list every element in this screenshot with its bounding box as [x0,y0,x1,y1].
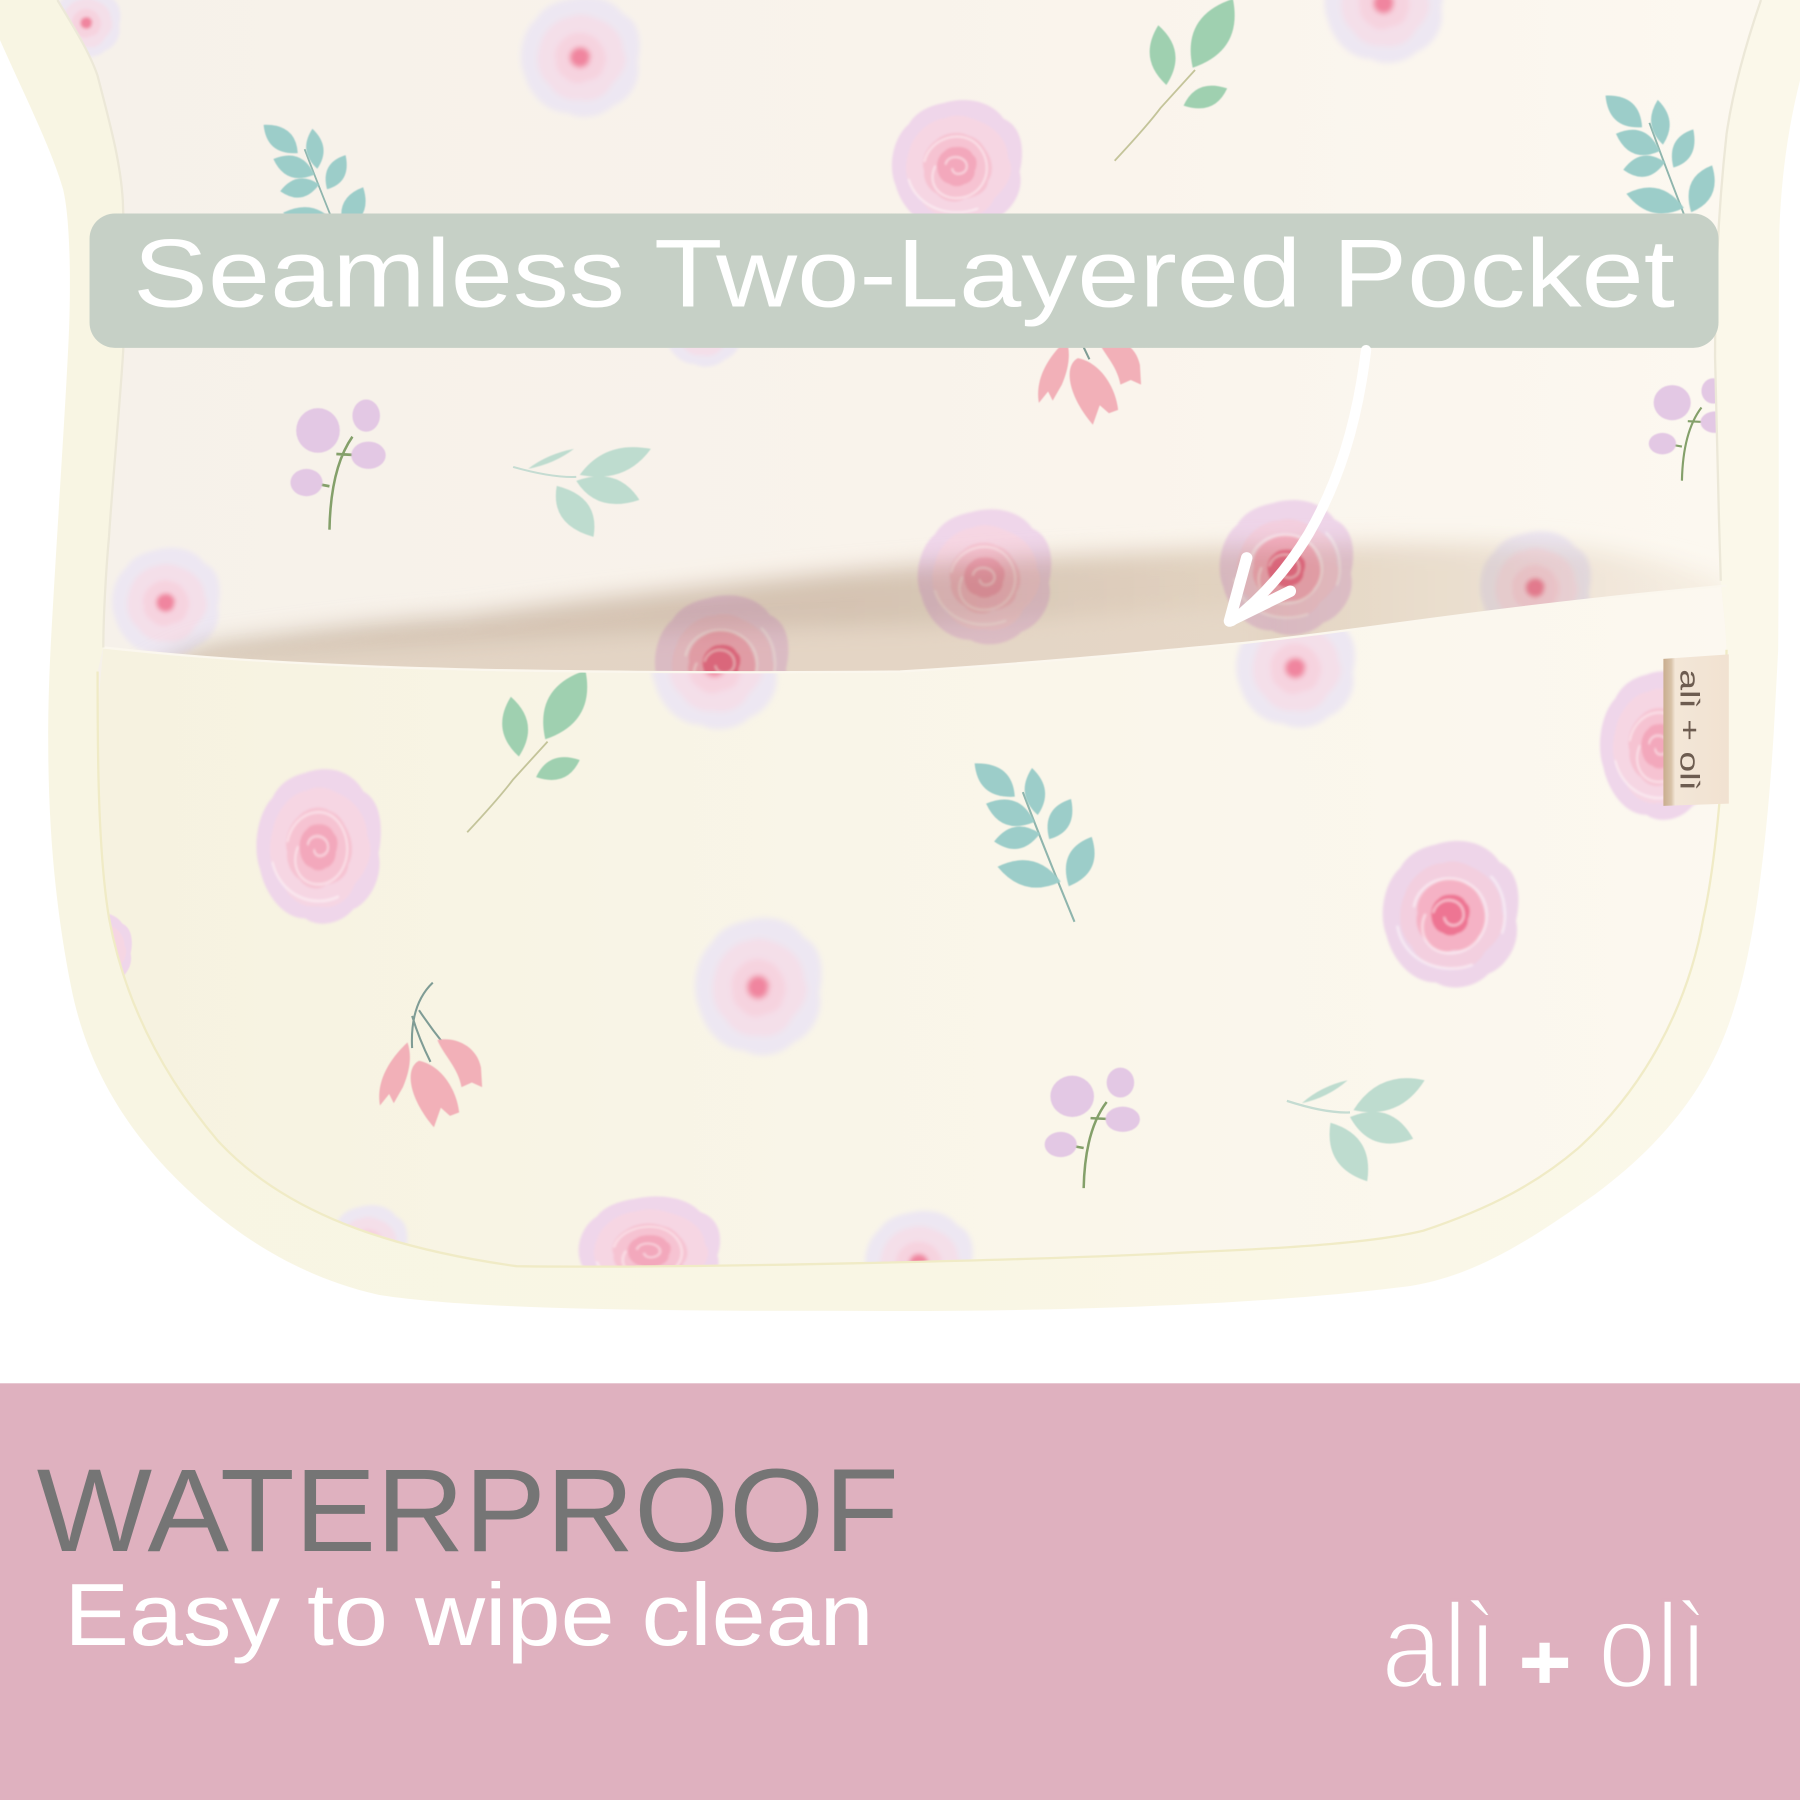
leaf sprig [263,124,366,214]
tulip [1038,348,1142,425]
binding seam [98,650,1727,1267]
pocket rose print [110,632,1696,1266]
bib: binding edge [0,0,1800,1311]
rose [917,508,1052,645]
upper binding seam shading [57,0,1761,647]
rose [1480,532,1590,610]
berries [290,399,386,530]
pocket lip highlight [103,585,1727,672]
upper rose print [52,0,1730,734]
rose [671,348,736,366]
rose [866,1211,972,1262]
tulip [379,983,482,1127]
pocket inner shadow [160,536,1717,672]
bottom banner [0,1383,1800,1800]
rose [1216,498,1356,638]
leaf sprig [467,670,587,832]
berries [1045,1068,1140,1188]
shadow deepening near the lip [236,620,1179,671]
brand logo: olì [1598,1579,1708,1714]
brand logo [1381,1579,1708,1714]
rose [578,1196,721,1266]
rose [892,100,1022,214]
rose [654,673,776,728]
care label tag [1663,654,1729,806]
callout text: Seamless Two-Layered Pocket [133,221,1675,328]
rose [654,594,789,672]
tag text: alì + olì [1675,669,1705,791]
rose [1599,670,1696,820]
leaf sprig [975,763,1095,922]
leaf sprig [1605,95,1716,214]
subheading: Easy to wipe clean: Easy to wipe clean [64,1565,874,1664]
leaf sprig [513,447,651,537]
rose [1324,0,1444,63]
rose [1379,839,1522,991]
rose [112,548,220,657]
berries [1648,378,1716,481]
rose [694,918,822,1056]
rose [520,0,640,117]
leaf sprig [1287,1078,1425,1181]
brand logo: alì [1381,1579,1498,1714]
rose [110,914,132,975]
rose [256,768,382,924]
leaf sprig [1115,0,1235,161]
rose [1236,632,1354,728]
arrow pointing to pocket [1229,350,1366,621]
rose [338,1206,407,1243]
pocket front layer [99,588,1723,1266]
headline: WATERPROOF: WATERPROOF [37,1445,899,1577]
bib: upper layer fabric [60,0,1716,672]
rose [62,0,119,56]
callout heading bar [90,214,1718,348]
